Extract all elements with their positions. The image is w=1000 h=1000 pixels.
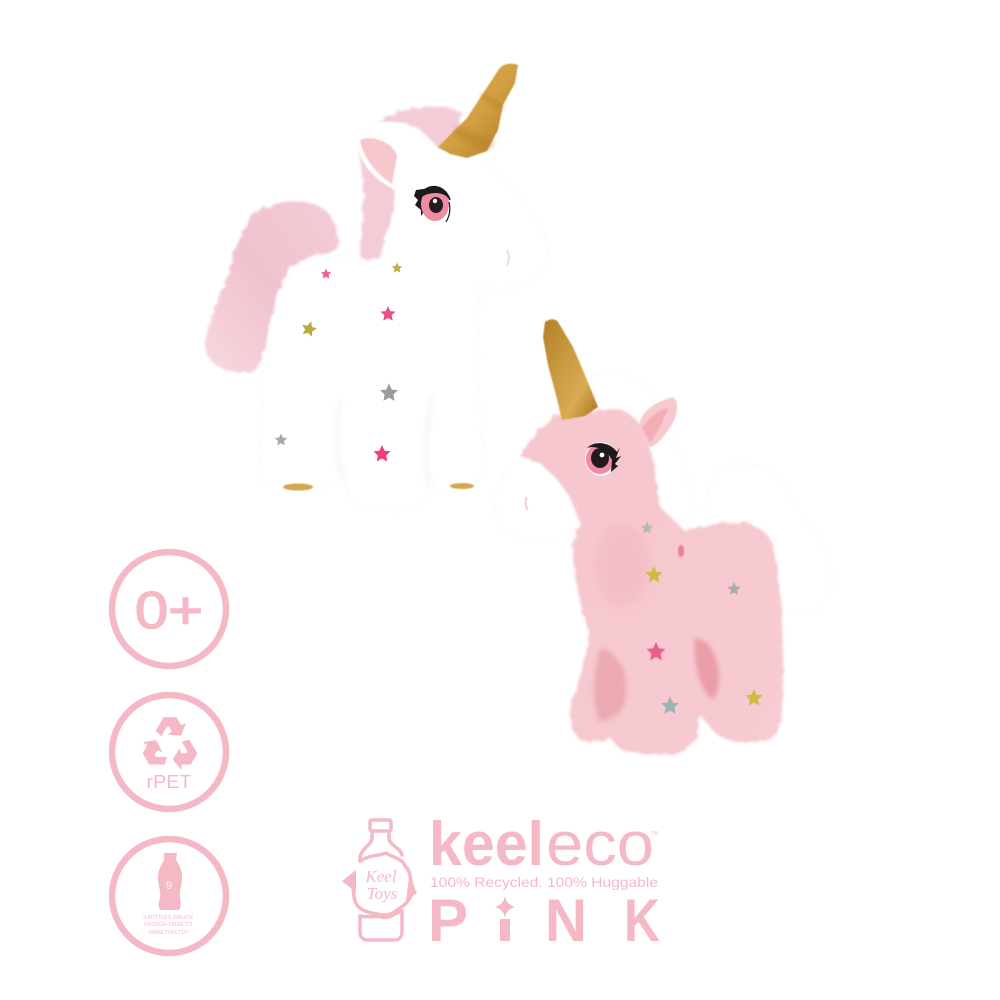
pink unicorn chest shading	[594, 523, 650, 607]
rPET badge	[112, 695, 226, 809]
letter P: P	[428, 887, 468, 954]
pink unicorn horn	[543, 319, 598, 420]
pink unicorn inner leg shading	[594, 638, 719, 722]
tagline: 100% Recycled. 100% Huggable	[430, 874, 658, 890]
PINK wordmark	[428, 887, 660, 954]
pink unicorn mane	[590, 372, 695, 530]
bottles caption: ENOUGH FIBRE TO	[144, 922, 192, 928]
sparkle i	[495, 896, 515, 941]
trademark: TM	[651, 831, 658, 837]
white unicorn nostril	[507, 250, 509, 266]
age badge: 0+: 0+	[135, 582, 203, 640]
pink unicorn eye	[585, 442, 621, 476]
white unicorn hooves	[283, 483, 474, 490]
logo arrows	[342, 870, 417, 900]
age badge: 0+	[112, 552, 226, 666]
bottle count: 9	[166, 880, 172, 892]
letter K: K	[624, 887, 660, 954]
pink unicorn ear	[638, 397, 677, 447]
pink unicorn stars	[641, 522, 763, 714]
eco: eco	[546, 810, 654, 879]
keel toys script: Keel	[364, 867, 397, 886]
white unicorn plush	[205, 64, 548, 510]
white unicorn eye	[414, 187, 450, 222]
pink unicorn body	[520, 410, 783, 755]
bottles caption: MAKE THIS TOY	[149, 930, 189, 936]
rPET label: rPET	[146, 772, 192, 792]
white unicorn horn	[438, 64, 518, 158]
bottle outline	[351, 820, 413, 940]
icon: recycle arrows	[138, 717, 201, 773]
icon: bottle	[158, 853, 182, 910]
letter N: N	[545, 887, 587, 954]
white unicorn mane	[359, 106, 462, 262]
keel toys bottle logo	[342, 820, 417, 940]
pink unicorn plush	[494, 319, 832, 755]
keeleco wordmark	[429, 810, 658, 890]
white unicorn body	[260, 123, 548, 510]
white unicorn tail	[205, 202, 338, 373]
pink unicorn tail	[706, 463, 832, 615]
keel toys script second line: Toys	[367, 884, 398, 903]
pink unicorn muzzle	[494, 458, 578, 540]
white unicorn leg shading	[337, 395, 432, 490]
bottles caption: 9 BOTTLES CREATE	[143, 915, 194, 921]
bottles badge	[112, 839, 226, 953]
white unicorn ear	[356, 122, 413, 190]
pink unicorn tag	[678, 545, 684, 557]
white unicorn stars	[275, 262, 402, 461]
keel: keel	[429, 810, 544, 879]
pink unicorn nostril	[526, 497, 528, 510]
